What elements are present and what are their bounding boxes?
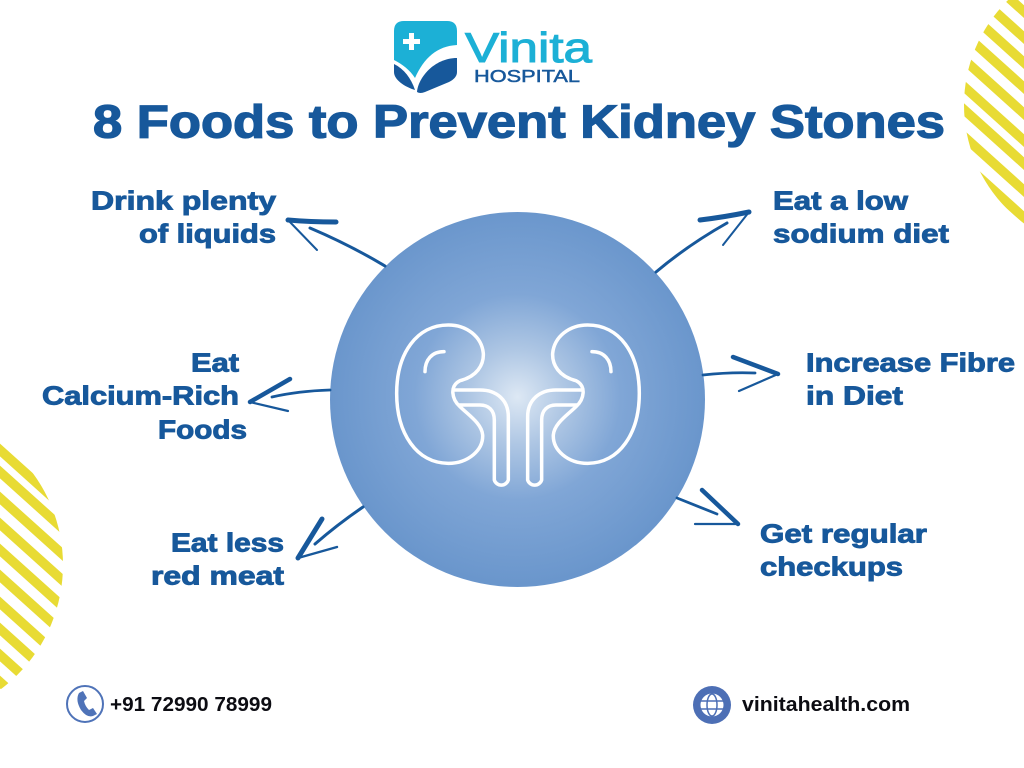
label: get regular checkups: [760, 518, 927, 582]
label: eat a low sodium diet: sodium diet: [773, 218, 949, 248]
icon: phone: [67, 686, 103, 722]
label: get regular checkups: checkups: [760, 552, 903, 582]
gradient disc: [330, 212, 705, 587]
arrow: to eat less red meat: [298, 507, 363, 558]
label: eat calcium-rich foods: Eat: [191, 348, 239, 378]
label: eat calcium-rich foods: Calcium-Rich: [42, 380, 239, 410]
icon: shield: [394, 21, 457, 93]
label: eat a low sodium diet: Eat a low: [773, 186, 909, 216]
label: eat less red meat: Eat less: [171, 528, 284, 558]
arrow: to low sodium diet: [656, 212, 749, 272]
arrow: to increase fibre: [703, 357, 778, 391]
arrow: to calcium-rich foods: [250, 379, 330, 411]
central circle with kidneys: [330, 212, 705, 587]
website address: vinitahealth.com: [742, 694, 910, 716]
label: eat calcium-rich foods: Foods: [158, 414, 247, 444]
label: eat less red meat: [151, 528, 284, 590]
logo: Vinita Hospital: [394, 21, 593, 93]
icon: kidneys: [397, 325, 639, 485]
arrow: to drink plenty of liquids: [288, 220, 385, 266]
logo wordmark: Vinita: [465, 24, 593, 71]
phone number: +91 72990 78999: [110, 694, 272, 716]
label: eat a low sodium diet: [773, 186, 949, 248]
label: eat calcium-rich foods: [42, 348, 247, 444]
label: get regular checkups: Get regular: [760, 518, 927, 548]
decoration: bottom-left striped circle: [0, 444, 63, 690]
label: increase fibre in diet: in Diet: [806, 380, 903, 410]
contact: website: [693, 686, 910, 724]
label: drink plenty of liquids: [91, 186, 277, 248]
label: drink plenty of liquids: of liquids: [139, 218, 276, 248]
label: increase fibre in diet: [806, 348, 1015, 410]
logo subtitle: HOSPITAL: [474, 66, 580, 86]
label: drink plenty of liquids: Drink plenty: [91, 186, 277, 216]
arrow: to regular checkups: [677, 490, 738, 524]
title: 8 Foods to Prevent Kidney Stones: [93, 96, 945, 148]
label: increase fibre in diet: Increase Fibre: [806, 348, 1015, 378]
label: eat less red meat: red meat: [151, 560, 284, 590]
contact: phone: [67, 686, 272, 722]
decoration: top-right striped circle: [964, 0, 1024, 224]
icon: globe: [693, 686, 731, 724]
